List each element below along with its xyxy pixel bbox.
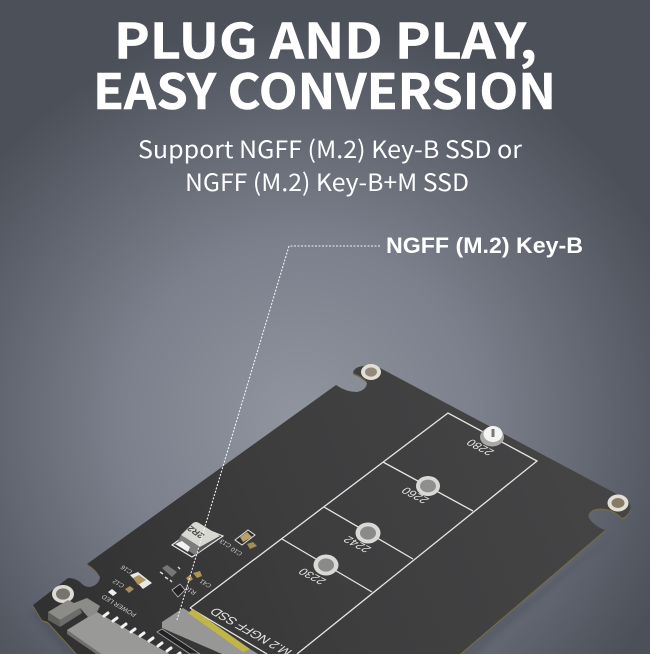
M.2 connector [157, 608, 258, 654]
subtitle [138, 130, 523, 198]
size labels [206, 437, 497, 654]
board edge [33, 366, 631, 654]
small components: R16 [183, 584, 198, 596]
size labels: 2260 [399, 485, 432, 505]
dashed leader line [177, 246, 380, 620]
M.2 slot outline [190, 413, 537, 654]
SATA connector [48, 598, 180, 654]
inductor L1 [172, 522, 223, 557]
size labels: 2230 [296, 566, 329, 586]
small components: C41 [198, 577, 213, 589]
small components: C10 [229, 545, 244, 557]
small components: C12 [111, 577, 126, 589]
callout label: NGFF (M.2) Key-B: NGFF (M.2) Key-B [386, 233, 583, 258]
title [93, 2, 556, 123]
board surface [33, 365, 631, 654]
small components: C16 [119, 563, 134, 575]
subtitle: NGFF (M.2) Key-B+M SSD [185, 163, 469, 198]
SSD adapter board [30, 364, 631, 654]
small components: POWER LED [100, 593, 138, 618]
small components [100, 530, 257, 618]
inductor L1: 2R2 [185, 524, 206, 540]
size labels: 2242 [341, 534, 374, 554]
subtitle: Support NGFF (M.2) Key-B SSD or [138, 130, 523, 165]
mounting holes [52, 364, 628, 603]
standoffs [314, 426, 504, 576]
size labels: 2280 [464, 437, 497, 457]
board shadow [30, 535, 612, 654]
small components: C13 [218, 537, 233, 549]
title: PLUG AND PLAY, [114, 2, 537, 72]
title: EASY CONVERSION [93, 53, 556, 123]
